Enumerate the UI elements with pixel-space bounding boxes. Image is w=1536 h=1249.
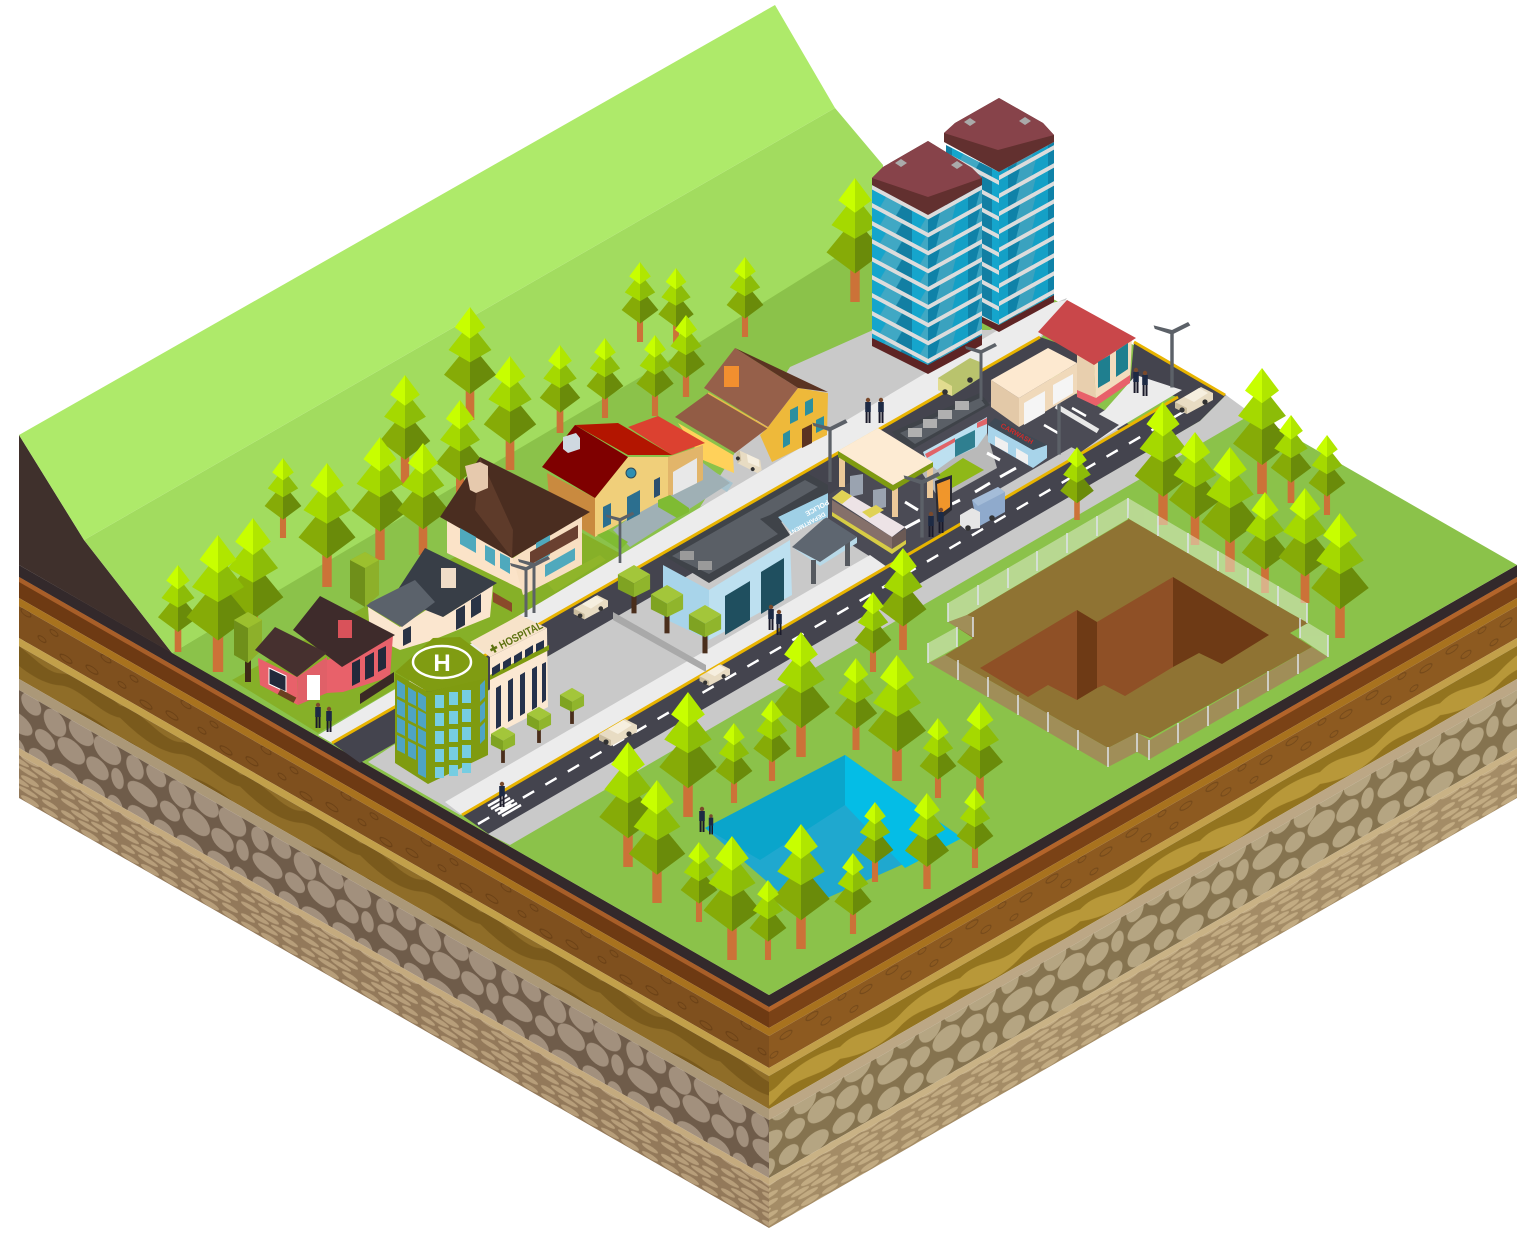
- people near end house: [1133, 368, 1148, 396]
- van: [938, 358, 980, 396]
- lower sidewalk: [445, 555, 887, 815]
- box tree left: [234, 612, 262, 682]
- house lots: [232, 510, 625, 733]
- pond: [705, 755, 962, 910]
- red roof house driveway: [613, 463, 730, 547]
- crosswalk: [488, 795, 521, 816]
- station asphalt: [828, 373, 1130, 566]
- people at gas station: [928, 508, 944, 537]
- box tree behind houses: [350, 552, 379, 607]
- fence back panels: [928, 498, 1328, 663]
- garage: [991, 348, 1077, 427]
- police department: POLICE: [803, 498, 830, 517]
- ground plane: [172, 228, 1517, 995]
- big brown roof house: [440, 457, 590, 595]
- gray plaza behind sidewalk: [700, 298, 1067, 507]
- store: [892, 393, 990, 470]
- truck: [960, 487, 1005, 531]
- front tower: [872, 141, 982, 374]
- people near pond: [699, 807, 713, 834]
- road shoulder: [488, 395, 1252, 845]
- police department: DEPARTMENT: [787, 510, 826, 536]
- small red house: [255, 596, 395, 705]
- central block pavement: [368, 495, 885, 815]
- hospital building: ✚ HOSPITAL: [488, 620, 545, 657]
- hill top: [19, 5, 835, 540]
- upper road: [332, 337, 1084, 763]
- car wash: CARWASH: [999, 423, 1034, 446]
- hill slope: [84, 108, 883, 653]
- helipad tower: H: [433, 650, 451, 677]
- right tree cluster: [1060, 368, 1369, 638]
- right sidewalk: [1060, 375, 1182, 450]
- police department: [663, 473, 857, 640]
- store forecourt: [920, 433, 997, 500]
- pedestrians on upper sidewalk: [865, 398, 884, 423]
- hill trees: [158, 178, 884, 672]
- street lamps: [812, 322, 1190, 538]
- soil layers: right face: [769, 565, 1517, 1228]
- hospital box trees: [491, 688, 584, 763]
- back tower: [944, 98, 1054, 332]
- street lamps near houses: [510, 512, 634, 617]
- officers: [768, 605, 782, 635]
- gas station: [838, 428, 933, 517]
- gray roof house: [365, 548, 497, 650]
- car wash: [988, 418, 1047, 468]
- house with red roof at end of road: [1038, 300, 1136, 406]
- parking arrows: [905, 453, 1016, 528]
- parking bays: [1027, 398, 1119, 452]
- plaza box trees: [618, 565, 721, 653]
- fence front panels: [928, 498, 1328, 767]
- hill cut face: [19, 435, 172, 653]
- station curb strip: [975, 425, 1120, 510]
- lower tree cluster: [599, 548, 1003, 960]
- pedestrian at crosswalk: [499, 782, 505, 807]
- hedges and fence: [493, 555, 606, 612]
- construction pit: [945, 519, 1312, 748]
- helipad tower: [395, 637, 488, 784]
- lower road: [462, 342, 1226, 835]
- upper sidewalk: [318, 300, 1067, 743]
- planter curb: [613, 612, 706, 672]
- gas price sign: [935, 475, 952, 522]
- hospital building: [470, 615, 549, 737]
- bus: [832, 490, 906, 554]
- yellow brown-roof house: [675, 348, 828, 492]
- red roof house: [542, 416, 705, 550]
- cars: [574, 387, 1213, 746]
- soil layers: left face: [19, 565, 769, 1228]
- pedestrians at pink house: [315, 703, 332, 732]
- road markings: [332, 337, 1225, 824]
- lawn: [935, 458, 984, 488]
